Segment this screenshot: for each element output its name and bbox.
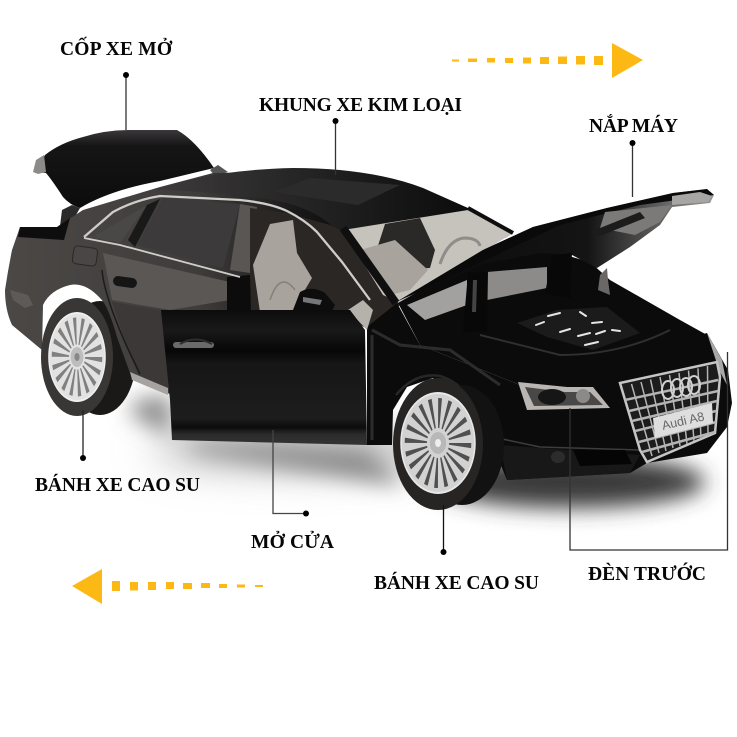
front wheel (393, 378, 504, 510)
callout: metal frame (259, 95, 462, 175)
open trunk lid (33, 130, 228, 226)
ground shadow (130, 395, 705, 508)
callout: open door: MỞ CỬA (251, 531, 334, 553)
hood struts (463, 253, 572, 332)
callout: trunk: CỐP XE MỞ (60, 38, 173, 60)
inner door handle (173, 340, 214, 348)
windshield (343, 208, 513, 303)
front fender and bumper (367, 303, 732, 480)
number plate: Audi A8 (661, 409, 706, 433)
seat (253, 220, 312, 312)
callout: trunk (60, 38, 173, 130)
engine cover (517, 307, 640, 350)
headlight (518, 382, 610, 410)
callout: rear rubber wheel (35, 410, 200, 496)
grille with rings and number plate (620, 362, 720, 462)
callout: metal frame: KHUNG XE KIM LOẠI (259, 95, 462, 116)
arrow: dashed yellow pointing right (452, 43, 643, 78)
roof (155, 168, 513, 238)
arrow: dashed yellow pointing left (72, 569, 263, 604)
callout: hood (589, 115, 678, 197)
rear door handle (112, 275, 138, 289)
callout: headlight: ĐÈN TRƯỚC (588, 563, 706, 585)
audi rings (662, 376, 700, 399)
side windows (93, 198, 257, 273)
callout: front rubber wheel (374, 505, 539, 594)
callout: headlight (570, 352, 728, 585)
car photo illustration (5, 130, 732, 510)
callout: open door (251, 430, 334, 553)
cabin interior seen through open door (227, 208, 400, 330)
fuel cap (72, 245, 98, 267)
open hood (398, 189, 714, 301)
rear wheel tread (64, 301, 136, 415)
callout: front rubber wheel: BÁNH XE CAO SU (374, 572, 539, 594)
callout: rear rubber wheel: BÁNH XE CAO SU (35, 474, 200, 496)
engine bay (398, 248, 707, 385)
open door (161, 310, 367, 445)
chrome window trim (84, 196, 370, 300)
rear wheel (41, 298, 113, 416)
car body side (5, 172, 355, 405)
callout: hood: NẮP MÁY (589, 115, 678, 137)
door mirror and hinge (293, 289, 373, 330)
